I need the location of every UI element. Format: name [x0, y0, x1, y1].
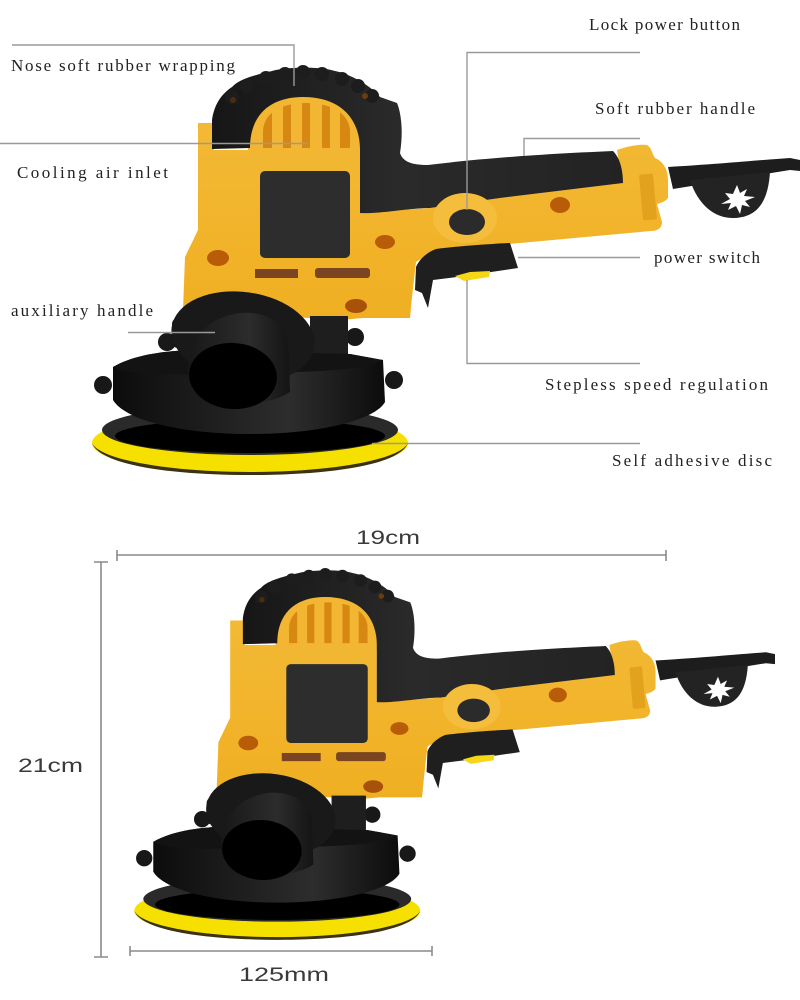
dimension: disc 125mm: 125mm [239, 965, 329, 986]
illustration: polisher with labelled parts [92, 65, 800, 475]
leader line: power switch [518, 256, 640, 258]
illustration: polisher with dimensions [134, 568, 775, 940]
label: stepless speed regulation: Stepless speed regulation [545, 375, 768, 394]
dimension: height 21cm [18, 562, 108, 957]
label: lock power button: Lock power button [589, 15, 740, 34]
label: cooling air inlet: Cooling air inlet [17, 163, 168, 182]
label: self adhesive disc: Self adhesive disc [612, 451, 772, 470]
dimension: disc 125mm [130, 946, 432, 986]
label: auxiliary handle: auxiliary handle [11, 301, 153, 320]
label: soft rubber handle: Soft rubber handle [595, 99, 755, 118]
dimension: width 19cm [117, 528, 666, 561]
leader line: auxiliary handle [128, 332, 215, 334]
leader line: nose soft rubber wrapping [12, 45, 294, 86]
leader line: soft rubber handle [524, 138, 640, 156]
label: power switch: power switch [654, 248, 760, 267]
leader line: self adhesive disc [372, 442, 640, 444]
leader line: cooling air inlet [0, 142, 308, 144]
label: nose soft rubber wrapping: Nose soft rubber wrapping [11, 56, 236, 75]
leader line: lock power button [467, 52, 640, 210]
dimension: width 19cm: 19cm [356, 528, 420, 549]
dimension: height 21cm: 21cm [18, 756, 83, 777]
leader line: stepless speed regulation [467, 280, 640, 364]
